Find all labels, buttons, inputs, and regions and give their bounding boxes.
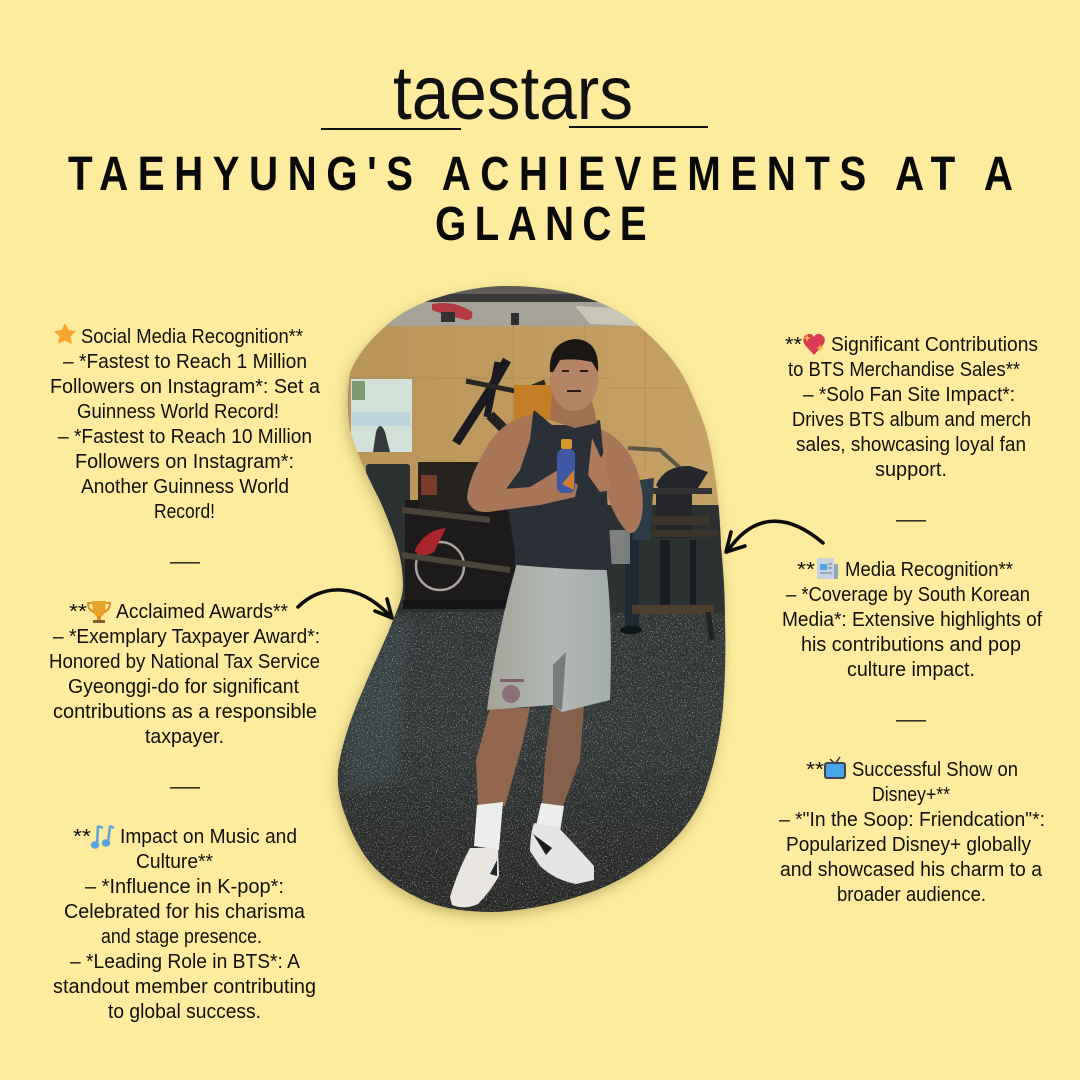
text block: media recognition: ** xyxy=(797,559,815,581)
text block: disney+ show xyxy=(779,757,1045,906)
peace hand xyxy=(588,438,607,492)
text block: disney+ show: Successful Show on xyxy=(852,759,1018,781)
text block: media recognition: Media Recognition** xyxy=(845,559,1013,581)
ceiling xyxy=(386,286,639,326)
text block: merchandise sales: support. xyxy=(875,459,947,481)
legs xyxy=(476,706,584,806)
divider text: ——— xyxy=(896,709,926,731)
text block: merchandise sales: Significant Contributions xyxy=(831,334,1038,356)
text block: merchandise sales: – *Solo Fan Site Impact*: xyxy=(803,384,1015,406)
text block: impact on music and culture xyxy=(53,826,316,1023)
divider text: ——— xyxy=(896,509,926,531)
text block: acclaimed awards: taxpayer. xyxy=(145,726,224,748)
floor xyxy=(330,505,740,920)
text block: merchandise sales xyxy=(785,334,1038,481)
icon: trophy xyxy=(88,601,110,623)
socks xyxy=(474,802,564,850)
text block: media recognition: his contributions and pop xyxy=(801,634,1021,656)
text block: media recognition: – *Coverage by South Korean xyxy=(786,584,1030,606)
right arm xyxy=(598,428,643,533)
left arm xyxy=(467,414,578,512)
text block: acclaimed awards: ** xyxy=(69,601,87,623)
logo: taestars: taestars xyxy=(393,51,633,136)
title xyxy=(68,148,1013,251)
text block: disney+ show: – *"In the Soop: Friendcation"*: xyxy=(779,809,1045,831)
text block: social media recognition: Another Guinness World xyxy=(81,476,289,498)
left shoe xyxy=(450,848,499,907)
text block: social media recognition: – *Fastest to Reach 1 Million xyxy=(63,351,307,373)
right shoe xyxy=(530,823,594,884)
text block: merchandise sales: sales, showcasing loyal fan xyxy=(796,434,1026,456)
text block: impact on music and culture: – *Influence in K-pop*: xyxy=(85,876,284,898)
text block: acclaimed awards xyxy=(49,601,320,748)
divider text: ——— xyxy=(170,776,200,798)
wall xyxy=(330,310,740,550)
text block: social media recognition: Guinness World Record! xyxy=(77,401,279,423)
text block: impact on music and culture: ** xyxy=(73,826,91,848)
text block: social media recognition: Social Media Recognition** xyxy=(81,326,303,348)
text block: social media recognition: Followers on Instagram*: Set a xyxy=(50,376,321,398)
text block: acclaimed awards: Gyeonggi-do for significant xyxy=(68,676,299,698)
face xyxy=(562,371,588,391)
man xyxy=(450,339,643,907)
text block: merchandise sales: to BTS Merchandise Sales** xyxy=(788,359,1020,381)
dark cabinet xyxy=(366,464,410,526)
text block: disney+ show: Disney+** xyxy=(872,784,950,806)
text block: acclaimed awards: Honored by National Tax Service xyxy=(49,651,320,673)
hair xyxy=(550,339,598,372)
divider text: ——— xyxy=(170,551,200,573)
photo: man in a gym xyxy=(330,280,740,922)
head xyxy=(550,360,598,411)
icon: music notes xyxy=(92,826,114,848)
text block: media recognition xyxy=(782,558,1042,681)
neck xyxy=(550,392,597,428)
text block: social media recognition: Followers on Instagram*: xyxy=(75,451,294,473)
text block: impact on music and culture: Impact on Music and xyxy=(120,826,297,848)
text block: impact on music and culture: to global success. xyxy=(108,1001,261,1023)
text block: impact on music and culture: Culture** xyxy=(136,851,213,873)
left gym machine xyxy=(402,360,560,609)
text block: media recognition: Media*: Extensive highlights of xyxy=(782,609,1042,631)
text block: social media recognition xyxy=(50,323,321,523)
text block: merchandise sales: ** xyxy=(785,334,802,356)
blob shadow xyxy=(336,291,723,917)
arrow: left text to photo xyxy=(298,590,392,618)
tank top xyxy=(505,410,612,570)
right gym machine xyxy=(606,448,718,640)
text block: disney+ show: ** xyxy=(806,759,824,781)
text block: acclaimed awards: – *Exemplary Taxpayer Award*: xyxy=(53,626,320,648)
text block: disney+ show: and showcased his charm to a xyxy=(780,859,1043,881)
text block: disney+ show: Popularized Disney+ globally xyxy=(786,834,1031,856)
title: GLANCE xyxy=(435,198,647,251)
text block: acclaimed awards: contributions as a responsible xyxy=(53,701,317,723)
shorts xyxy=(487,563,611,712)
window xyxy=(351,379,412,452)
icon: sparkling heart xyxy=(803,334,825,355)
wall panels xyxy=(350,325,690,479)
text block: social media recognition: – *Fastest to Reach 10 Million xyxy=(58,426,312,448)
title: TAEHYUNG'S ACHIEVEMENTS AT A xyxy=(68,148,1013,201)
text block: media recognition: culture impact. xyxy=(847,659,975,681)
text block: impact on music and culture: standout member contributing xyxy=(53,976,316,998)
text block: impact on music and culture: – *Leading Role in BTS*: A xyxy=(70,951,301,973)
text block: impact on music and culture: and stage presence. xyxy=(101,926,262,948)
text block: merchandise sales: Drives BTS album and merch xyxy=(792,409,1031,431)
icon: newspaper xyxy=(817,558,838,579)
bottle xyxy=(557,439,575,493)
text block: acclaimed awards: Acclaimed Awards** xyxy=(116,601,288,623)
text block: disney+ show: broader audience. xyxy=(837,884,986,906)
icon: television xyxy=(825,757,845,778)
text block: social media recognition: Record! xyxy=(154,501,215,523)
icon: star xyxy=(54,323,76,344)
arrow: right text to photo xyxy=(726,521,823,552)
text block: impact on music and culture: Celebrated for his charisma xyxy=(64,901,306,923)
